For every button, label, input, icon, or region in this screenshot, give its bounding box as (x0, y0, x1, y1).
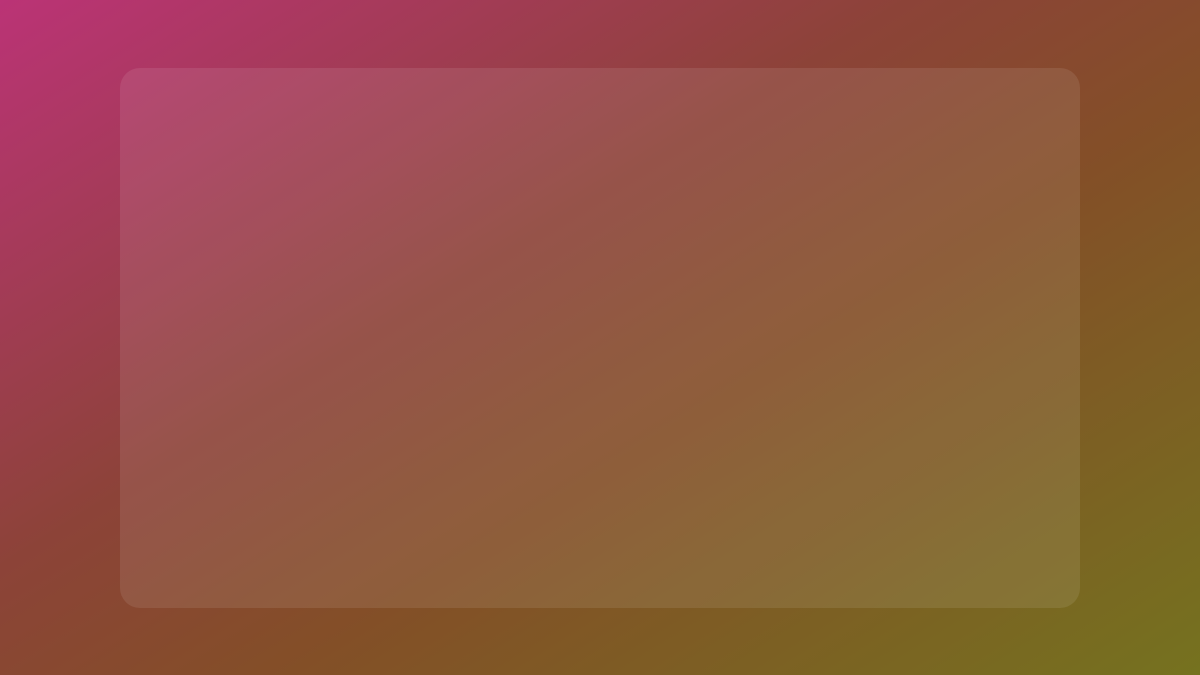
panel: translucent rounded card (120, 68, 1080, 608)
